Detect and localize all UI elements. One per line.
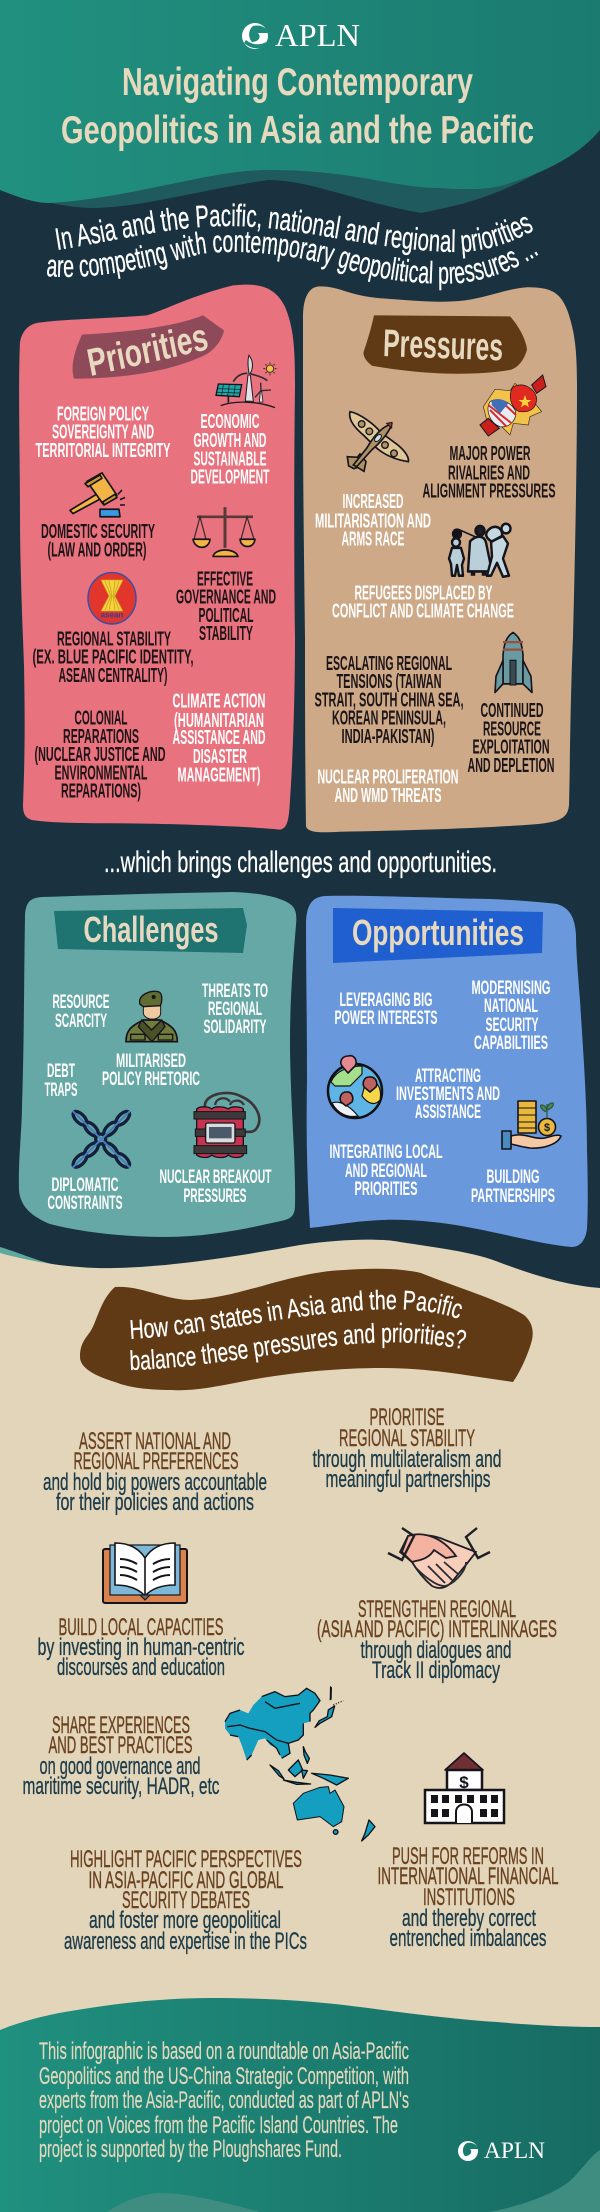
text: building partnerships: BUILDING bbox=[486, 1167, 540, 1188]
panel: pressures bbox=[303, 286, 577, 832]
text: prioritise regional stability: through multilateralism and bbox=[312, 1446, 502, 1473]
title: Navigating Contemporary bbox=[122, 61, 473, 104]
text: foreign policy bbox=[36, 403, 170, 462]
text: build local capacities: by investing in human-centric bbox=[38, 1634, 244, 1661]
icon: wind turbines and solar panel bbox=[216, 355, 277, 408]
title bbox=[61, 61, 534, 152]
text: integrating local: INTEGRATING LOCAL bbox=[330, 1142, 443, 1163]
text: prioritise regional stability: REGIONAL STABILITY bbox=[339, 1425, 475, 1452]
text: nuclear proliferation: AND WMD THREATS bbox=[334, 784, 442, 807]
text: attracting investments: ATTRACTING bbox=[415, 1066, 481, 1087]
text: modernising security: CAPABILTIIES bbox=[474, 1033, 548, 1054]
dark navy background bbox=[0, 0, 600, 1300]
icon: scales of justice bbox=[193, 507, 255, 556]
text: colonial reparations: COLONIAL bbox=[74, 707, 127, 730]
text: regional tensions: ESCALATING REGIONAL bbox=[326, 652, 452, 675]
icon: crossed chains bbox=[71, 1109, 132, 1170]
text: prioritise regional stability: PRIORITISE bbox=[370, 1404, 444, 1431]
text: major power rivalries: RIVALRIES AND bbox=[448, 462, 530, 484]
logo: APLN top: APLN bbox=[275, 17, 360, 53]
intro sentence on wavy baseline: are competing with contemporary geopolitical pressures ... bbox=[47, 232, 538, 290]
text: attracting investments: INVESTMENTS AND bbox=[396, 1084, 500, 1105]
text: share experiences: SHARE EXPERIENCES bbox=[52, 1712, 190, 1739]
beige lower section bbox=[0, 1240, 600, 2212]
text: regional tensions: INDIA-PAKISTAN) bbox=[342, 725, 435, 748]
text: colonial reparations: REPARATIONS bbox=[63, 725, 139, 748]
icon: bank building bbox=[425, 1753, 504, 1823]
text: regional stability: REGIONAL STABILITY bbox=[57, 628, 171, 651]
text: leveraging big power: LEVERAGING BIG bbox=[340, 990, 432, 1011]
text: resource scarcity: SCARCITY bbox=[55, 1011, 107, 1032]
text: resource exploitation: RESOURCE bbox=[483, 718, 541, 741]
text: threats to solidarity: SOLIDARITY bbox=[204, 1017, 267, 1038]
question text: balance these pressures and priorities? bbox=[130, 1322, 466, 1370]
text: domestic security: (LAW AND ORDER) bbox=[47, 539, 146, 562]
icon: handshake bbox=[388, 1528, 490, 1588]
text: resource exploitation bbox=[468, 700, 554, 777]
text: attracting investments: ASSISTANCE bbox=[415, 1102, 481, 1123]
text: share experiences: maritime security, HADR, etc bbox=[22, 1773, 220, 1800]
text: domestic security bbox=[41, 521, 155, 562]
text: climate action: (HUMANITARIAN bbox=[174, 709, 264, 732]
text: assert national preferences: for their policies and actions bbox=[56, 1489, 254, 1516]
text: build local capacities: BUILD LOCAL CAPACITIES bbox=[58, 1614, 224, 1641]
text: economic growth bbox=[190, 410, 270, 489]
text: build local capacities: discourses and education bbox=[57, 1654, 225, 1681]
icon: soldier bbox=[126, 991, 177, 1042]
text: nuclear proliferation: NUCLEAR PROLIFERATION bbox=[318, 766, 458, 789]
text: modernising security: NATIONAL bbox=[484, 996, 538, 1017]
text: increased militarisation bbox=[315, 491, 431, 551]
heading: pressures: Pressures bbox=[382, 321, 504, 369]
text: effective governance: EFFECTIVE bbox=[197, 568, 253, 591]
text: foreign policy: SOVEREIGNTY AND bbox=[52, 421, 154, 444]
text: modernising security: SECURITY bbox=[486, 1015, 539, 1036]
text: threats to solidarity bbox=[202, 981, 268, 1038]
text: effective governance: STABILITY bbox=[199, 622, 253, 645]
text: build local capacities bbox=[38, 1614, 244, 1681]
logo: APLN footer: APLN bbox=[484, 2138, 545, 2163]
header band bbox=[0, 0, 600, 213]
text: assert national preferences bbox=[43, 1428, 267, 1516]
heading: pressures bbox=[363, 315, 527, 374]
text: colonial reparations: (NUCLEAR JUSTICE AND bbox=[34, 743, 165, 766]
text: militarised rhetoric: MILITARISED bbox=[116, 1051, 186, 1072]
icon: refugees family bbox=[449, 524, 510, 577]
icon: hand with coins and plant: $ bbox=[544, 1122, 550, 1134]
question text bbox=[130, 1290, 466, 1370]
text: assert national preferences: ASSERT NATIONAL AND bbox=[79, 1428, 231, 1455]
heading: opportunities: Opportunities bbox=[352, 912, 524, 953]
text: resource exploitation: CONTINUED bbox=[480, 700, 543, 722]
text: militarised rhetoric: POLICY RHETORIC bbox=[102, 1069, 200, 1090]
text: foreign policy: FOREIGN POLICY bbox=[57, 403, 149, 426]
text: climate action: ASSISTANCE AND bbox=[172, 726, 266, 749]
text: economic growth: SUSTAINABLE bbox=[193, 448, 266, 471]
text: increased militarisation: INCREASED bbox=[342, 491, 403, 513]
text: refugees: REFUGEES DISPLACED BY bbox=[355, 582, 493, 604]
text: highlight pacific perspectives: HIGHLIGHT PACIFIC PERSPECTIVES bbox=[70, 1846, 302, 1873]
icon: gavel bbox=[70, 473, 125, 517]
text: share experiences bbox=[22, 1712, 220, 1800]
text: militarised rhetoric bbox=[102, 1051, 200, 1090]
text: nuclear breakout: PRESSURES bbox=[184, 1186, 246, 1207]
intro sentence on wavy baseline: In Asia and the Pacific, national and regional priorities bbox=[55, 203, 533, 259]
text: domestic security: DOMESTIC SECURITY bbox=[41, 521, 155, 543]
text: strengthen interlinkages: through dialogues and bbox=[360, 1637, 512, 1664]
panel: opportunities bbox=[306, 896, 588, 1247]
text: share experiences: on good governance and bbox=[40, 1753, 200, 1780]
text: regional stability: ASEAN CENTRALITY) bbox=[59, 664, 167, 687]
icon: open book bbox=[103, 1543, 187, 1603]
text: strengthen interlinkages bbox=[317, 1596, 557, 1684]
text: effective governance: POLITICAL bbox=[199, 604, 254, 627]
text: building partnerships bbox=[471, 1167, 555, 1207]
text: threats to solidarity: THREATS TO bbox=[202, 981, 268, 1002]
text: nuclear breakout bbox=[160, 1167, 272, 1207]
text: economic growth: GROWTH AND bbox=[193, 430, 266, 452]
footer text bbox=[39, 2038, 409, 2163]
text: effective governance: GOVERNANCE AND bbox=[176, 586, 276, 609]
icon: asia pacific map bbox=[225, 1686, 375, 1841]
icon: asean emblem bbox=[88, 572, 136, 624]
heading: challenges bbox=[54, 908, 247, 953]
text: regional tensions: TENSIONS (TAIWAN bbox=[336, 671, 441, 693]
text: climate action: DISASTER bbox=[193, 746, 247, 768]
text: debt traps: DEBT bbox=[47, 1061, 75, 1082]
text: nuclear proliferation bbox=[318, 766, 458, 807]
icon: rocket bbox=[495, 632, 532, 692]
icon: hand with coins and plant bbox=[502, 1101, 561, 1149]
text: integrating local bbox=[330, 1142, 443, 1200]
text: strengthen interlinkages: Track II diplomacy bbox=[372, 1657, 500, 1684]
text: leveraging big power: POWER INTERESTS bbox=[334, 1008, 438, 1029]
text: highlight pacific perspectives: awareness and expertise in the PICs bbox=[64, 1928, 307, 1955]
text: diplomatic constraints: CONSTRAINTS bbox=[48, 1193, 122, 1214]
text: threats to solidarity: REGIONAL bbox=[208, 999, 262, 1020]
text: modernising security bbox=[472, 978, 550, 1054]
text: push for reforms bbox=[378, 1843, 558, 1952]
text: diplomatic constraints: DIPLOMATIC bbox=[52, 1175, 119, 1196]
question text: How can states in Asia and the Pacific bbox=[130, 1290, 462, 1339]
text: integrating local: PRIORITIES bbox=[354, 1179, 418, 1200]
text: major power rivalries: MAJOR POWER bbox=[450, 442, 531, 465]
text: climate action bbox=[172, 690, 266, 787]
icon: asean emblem: asean bbox=[101, 609, 123, 620]
text: climate action: MANAGEMENT) bbox=[178, 764, 261, 787]
icon: bank building: $ bbox=[459, 1773, 469, 1792]
logo: APLN footer bbox=[458, 2138, 545, 2163]
panel: priorities bbox=[19, 285, 295, 830]
text: highlight pacific perspectives bbox=[64, 1846, 307, 1955]
question banner bbox=[80, 1268, 533, 1390]
heading: priorities: Priorities bbox=[84, 315, 211, 384]
icon: bomb with timer bbox=[194, 1093, 259, 1158]
text: regional stability: (EX. BLUE PACIFIC IDENTITY, bbox=[33, 646, 194, 669]
text: regional tensions bbox=[314, 652, 463, 748]
text: assert national preferences: and hold big powers accountable bbox=[43, 1469, 267, 1496]
text: resource scarcity: RESOURCE bbox=[52, 992, 110, 1013]
panel: challenges bbox=[19, 892, 296, 1237]
text: regional tensions: KOREAN PENINSULA, bbox=[332, 707, 446, 730]
text: economic growth: DEVELOPMENT bbox=[190, 466, 270, 489]
text: colonial reparations: REPARATIONS) bbox=[61, 780, 141, 803]
text: share experiences: AND BEST PRACTICES bbox=[48, 1732, 192, 1759]
text: integrating local: AND REGIONAL bbox=[345, 1161, 427, 1182]
text: prioritise regional stability: meaningful partnerships bbox=[326, 1466, 490, 1493]
text: increased militarisation: MILITARISATION AND bbox=[315, 510, 431, 533]
text: debt traps: TRAPS bbox=[44, 1080, 78, 1101]
footer band bbox=[0, 1998, 600, 2212]
icon: boxing gloves usa china bbox=[480, 375, 546, 436]
text: economic growth: ECONOMIC bbox=[200, 410, 259, 433]
text: highlight pacific perspectives: SECURITY DEBATES bbox=[122, 1887, 250, 1914]
text: nuclear breakout: NUCLEAR BREAKOUT bbox=[160, 1167, 272, 1188]
text: resource scarcity bbox=[52, 992, 110, 1032]
text: colonial reparations bbox=[34, 707, 165, 803]
text: colonial reparations: ENVIRONMENTAL bbox=[54, 762, 148, 784]
text: climate action: CLIMATE ACTION bbox=[172, 690, 266, 713]
footer text: project is supported by the Ploughshares Fund. bbox=[39, 2136, 342, 2163]
heading: opportunities bbox=[333, 908, 543, 963]
text: debt traps bbox=[44, 1061, 78, 1101]
text: regional stability bbox=[33, 628, 194, 687]
text: foreign policy: TERRITORIAL INTEGRITY bbox=[36, 439, 170, 462]
text: diplomatic constraints bbox=[48, 1175, 122, 1214]
text: increased militarisation: ARMS RACE bbox=[342, 528, 404, 551]
text: prioritise regional stability bbox=[312, 1404, 502, 1493]
text: highlight pacific perspectives: and foster more geopolitical bbox=[89, 1907, 281, 1934]
text: major power rivalries bbox=[422, 442, 556, 503]
heading: challenges: Challenges bbox=[84, 909, 218, 950]
text: assert national preferences: REGIONAL PREFERENCES bbox=[74, 1448, 238, 1475]
icon: fighter plane bbox=[347, 412, 408, 471]
text: push for reforms: INSTITUTIONS bbox=[423, 1884, 515, 1911]
text: refugees bbox=[332, 582, 514, 623]
text: attracting investments bbox=[396, 1066, 500, 1123]
text: highlight pacific perspectives: IN ASIA-PACIFIC AND GLOBAL bbox=[88, 1867, 284, 1894]
text: regional tensions: STRAIT, SOUTH CHINA SEA, bbox=[314, 689, 463, 712]
text: effective governance bbox=[176, 568, 276, 645]
icon: globe with pins bbox=[328, 1056, 382, 1118]
text: leveraging big power bbox=[334, 990, 438, 1029]
